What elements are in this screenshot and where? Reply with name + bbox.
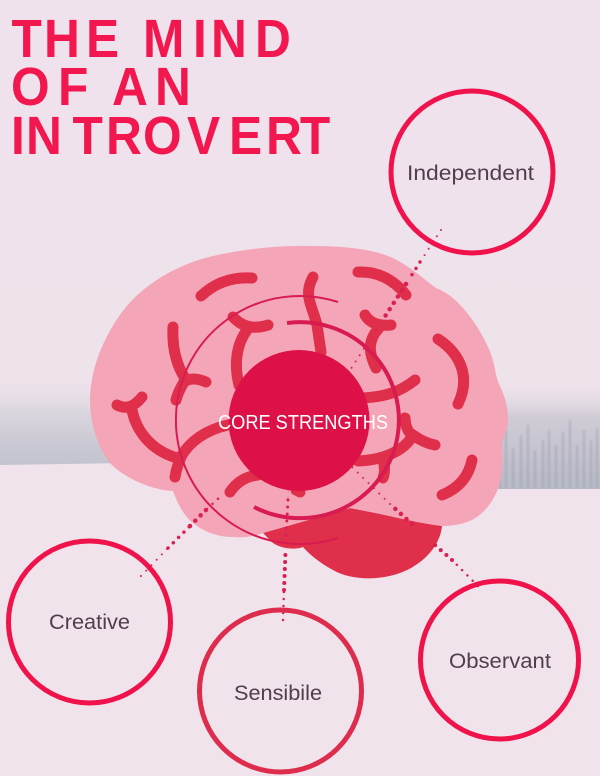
circle: Sensibile [200, 610, 362, 772]
title [11, 8, 331, 165]
brain illustration [90, 246, 508, 578]
circle: Creative [8, 541, 170, 703]
circle: Creative: Creative [49, 610, 130, 634]
circle: Observant: Observant [449, 649, 551, 673]
title: OF AN [11, 56, 191, 116]
core circle [228, 350, 370, 491]
circle: Independent [391, 91, 553, 253]
dotted connector: Creative [141, 495, 222, 576]
dotted connector: Observant [352, 467, 478, 586]
inner ring arc [254, 322, 399, 518]
title: INTROVERT [11, 105, 331, 165]
brain folds [117, 272, 472, 495]
circle: Independent: Independent [407, 161, 534, 185]
core label: CORE STRENGTHS [218, 412, 388, 434]
cerebellum [263, 508, 442, 578]
brain lobes [90, 246, 508, 537]
circle: Sensibile: Sensibile [234, 681, 322, 705]
core strengths hub [176, 296, 399, 544]
dotted connector: Independent [345, 230, 441, 378]
circle: Observant [420, 581, 578, 739]
outer ring arc [176, 296, 338, 544]
title: THE MIND [12, 8, 291, 68]
dotted connector: Sensibile [283, 465, 289, 620]
